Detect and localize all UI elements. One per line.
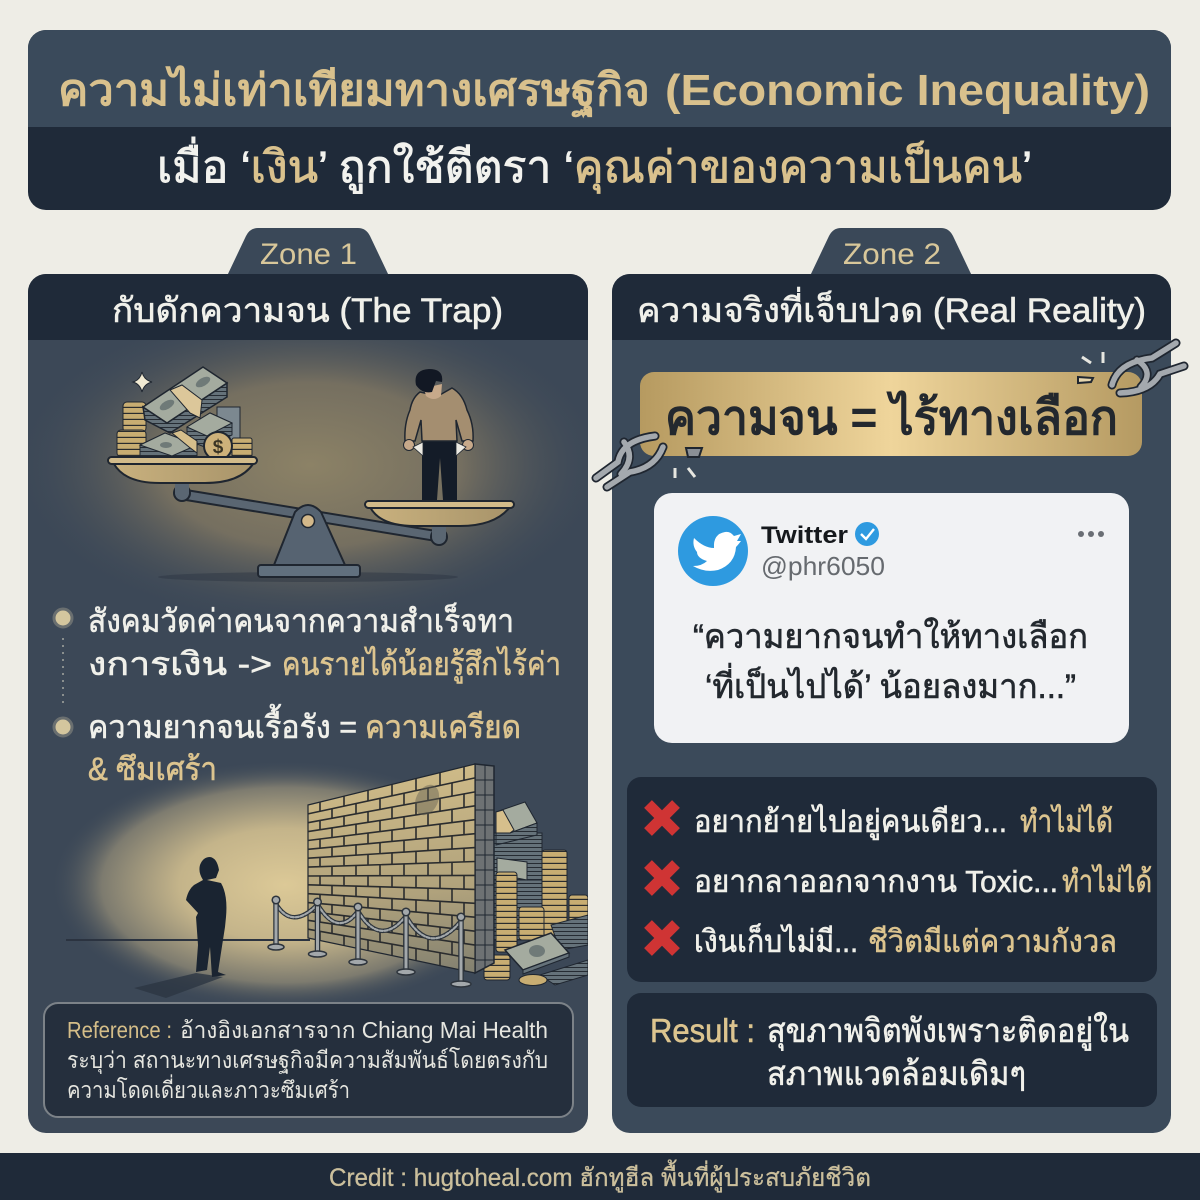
gold banner: ความจน = ไร้ทางเลือก bbox=[665, 389, 1118, 445]
result box: สุขภาพจิตพังเพราะติดอยู่ใน bbox=[767, 1012, 1129, 1051]
shadow bbox=[134, 973, 223, 998]
zone 2 tab bbox=[810, 228, 972, 276]
panel: zone 2 real reality bbox=[596, 274, 1184, 1133]
zone 2 tab: Zone 2 bbox=[843, 238, 941, 271]
twitter card: Twitter bbox=[761, 522, 848, 549]
result box: สภาพแวดล้อมเดิมๆ bbox=[767, 1055, 1026, 1092]
back stack bbox=[217, 407, 240, 440]
pans bbox=[114, 464, 253, 483]
bullet list: ความยากจนเรื้อรัง = bbox=[88, 704, 357, 745]
icon: red x 2 bbox=[648, 864, 676, 892]
man legs bbox=[422, 436, 457, 500]
panel heading: ความจริงที่เจ็บปวด (Real Reality) bbox=[637, 287, 1146, 330]
bullet list: ความเครียด bbox=[365, 709, 521, 745]
wall front bbox=[308, 764, 475, 973]
list of things that cannot be done: ชีวิตมีแต่ความกังวล bbox=[868, 924, 1117, 959]
list of things that cannot be done: อยากย้ายไปอยู่คนเดียว... bbox=[694, 804, 1007, 840]
stanchions and chains bbox=[276, 900, 461, 983]
illustration: man facing brick wall with money behind bbox=[66, 760, 588, 998]
man silhouette bbox=[186, 857, 226, 977]
beam bbox=[186, 490, 442, 542]
list of things that cannot be done: เงินเก็บไม่มี... bbox=[694, 923, 858, 959]
icon: broken chain right bbox=[1078, 343, 1184, 393]
bullet list: คนรายได้น้อยรู้สึกไร้ค่า bbox=[282, 646, 561, 684]
panel: zone 1 the trap bbox=[28, 274, 588, 1133]
icon: twitter avatar bbox=[678, 516, 748, 586]
list of things that cannot be done: ทำไม่ได้ bbox=[1062, 864, 1152, 899]
bullet list: & ซึมเศร้า bbox=[88, 751, 217, 787]
bullet dot 1 bbox=[54, 609, 72, 627]
icon: verified badge bbox=[855, 522, 879, 546]
icon: broken chain left bbox=[596, 436, 702, 487]
footer credit: Credit : hugtoheal.com ฮักทูฮีล พื้นที่ผู้ประสบภัยชีวิต bbox=[329, 1159, 871, 1193]
list of things that cannot be done bbox=[627, 777, 1157, 982]
bullet list: สังคมวัดค่าคนจากความสำเร็จทา bbox=[88, 602, 514, 639]
sparkle bbox=[133, 372, 152, 392]
quote text: “ความยากจนทำให้ทางเลือก bbox=[693, 617, 1088, 656]
zone 1 tab bbox=[227, 228, 389, 276]
icon: red x 1 bbox=[648, 804, 676, 832]
panel heading: กับดักความจน (The Trap) bbox=[112, 292, 503, 330]
footer credit bbox=[0, 1153, 1200, 1200]
small coins bbox=[232, 438, 252, 457]
gold banner bbox=[640, 372, 1142, 456]
subtitle: เมื่อ ‘เงิน’ ถูกใช้ตีตรา ‘คุณค่าของความเป็นคน’ bbox=[157, 136, 1032, 194]
pockets and hands bbox=[404, 440, 414, 450]
title banner bbox=[28, 30, 1171, 210]
icon: red x 3 bbox=[648, 924, 676, 952]
twitter card bbox=[654, 493, 1129, 743]
cash pile behind wall bbox=[494, 832, 542, 880]
bullet dot 2 bbox=[54, 718, 72, 736]
reference box: Reference : bbox=[67, 1017, 172, 1043]
wall side bbox=[475, 764, 494, 973]
title heading english: (Economic Inequality) bbox=[665, 66, 1150, 115]
lower cash stack bbox=[140, 433, 197, 457]
bullet list: งการเงิน -> bbox=[88, 646, 272, 682]
more menu dots bbox=[1078, 531, 1104, 537]
man torso bbox=[405, 388, 473, 441]
reference box bbox=[44, 1003, 573, 1117]
list of things that cannot be done: ทำไม่ได้ bbox=[1020, 804, 1113, 839]
coin stacks bbox=[123, 402, 146, 432]
bullet list bbox=[54, 602, 561, 787]
quote text: ‘ที่เป็นไปได้’ น้อยลงมาก...” bbox=[705, 663, 1076, 706]
man face and hair bbox=[424, 384, 442, 399]
fulcrum bbox=[274, 505, 345, 565]
title heading thai: ความไม่เท่าเทียมทางเศรษฐกิจ bbox=[58, 64, 650, 118]
dollar coin bbox=[204, 432, 232, 460]
zone 1 tab: Zone 1 bbox=[260, 238, 357, 271]
illustration: tilted scale with money and poor man: $ bbox=[213, 437, 224, 458]
quote text bbox=[693, 617, 1088, 706]
result box bbox=[627, 993, 1157, 1107]
illustration: tilted scale with money and poor man bbox=[108, 367, 514, 582]
result box: Result : bbox=[650, 1012, 755, 1049]
front cash bbox=[551, 915, 588, 950]
reference box: ระบุว่า สถานะทางเศรษฐกิจมีความสัมพันธ์โดยตรงกับ bbox=[67, 1047, 548, 1074]
middle cash stack bbox=[187, 413, 232, 448]
wall mortar rows bbox=[308, 778, 475, 959]
top cash stack bbox=[143, 383, 227, 433]
reference box: ความโดดเดี่ยวและภาวะซึมเศร้า bbox=[67, 1074, 350, 1103]
wall stain bbox=[415, 784, 439, 816]
reference box: อ้างอิงเอกสารจาก Chiang Mai Health bbox=[180, 1017, 548, 1043]
twitter card: @phr6050 bbox=[761, 551, 885, 581]
list of things that cannot be done: อยากลาออกจากงาน Toxic... bbox=[694, 864, 1058, 899]
coin stacks bbox=[542, 850, 567, 935]
